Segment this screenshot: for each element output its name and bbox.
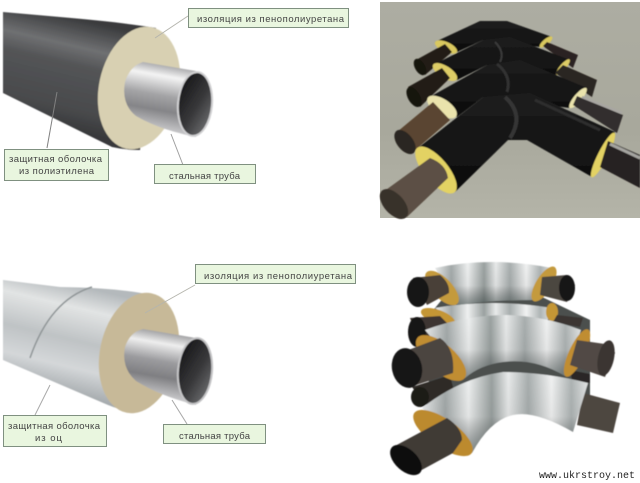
elbow 3 (388, 315, 618, 391)
leader line: steel pipe (172, 400, 187, 424)
elbow 4 (front) (385, 372, 620, 481)
elbow 1 (rear) (411, 21, 578, 77)
steel pipe (124, 329, 196, 405)
pipe jacket: galvanized steel (3, 280, 152, 412)
elbow 4 (front) (375, 93, 640, 224)
photo background: concrete floor (380, 2, 640, 218)
label: insulation: изоляция из пенополиуретана (197, 14, 345, 25)
label: steel pipe (154, 164, 256, 184)
label: jacket (4, 416, 106, 446)
label: jacket: из оц (35, 433, 63, 444)
foam insulation end (88, 285, 190, 421)
photo: galvanized insulated elbows (385, 262, 635, 482)
label: insulation (188, 8, 348, 28)
elbow 1 (top) (407, 262, 575, 311)
pipe jacket: black polyethylene (3, 12, 156, 150)
label: jacket: из полиэтилена (19, 166, 95, 177)
rear pipe stubs (412, 375, 455, 405)
leader line: jacket (35, 385, 50, 415)
leader line: insulation (155, 16, 188, 38)
elbow 3 (390, 60, 623, 158)
label: steel pipe (164, 424, 266, 444)
label: steel pipe: стальная труба (169, 171, 241, 182)
label: insulation (196, 264, 356, 284)
label: jacket: защитная оболочка (8, 421, 101, 432)
foam insulation end (87, 19, 191, 157)
elbow 2 (rear, behind) (408, 303, 583, 347)
leader line: jacket (47, 92, 57, 148)
diagram: polyethylene-jacketed pipe (3, 8, 348, 184)
photo: black insulated elbows (375, 2, 640, 224)
leader line: insulation (145, 285, 195, 313)
elbow 2 (403, 37, 597, 110)
steel pipe mouth (174, 336, 216, 406)
watermark: www.ukrstroy.net (539, 470, 635, 482)
steel pipe (124, 62, 196, 137)
diagram: galvanized-jacketed pipe (3, 264, 356, 446)
label: steel pipe: стальная труба (179, 431, 251, 442)
label: insulation: изоляция из пенополиуретана (204, 271, 353, 282)
label: jacket: защитная оболочка (9, 154, 103, 165)
jacket seam (30, 287, 92, 358)
steel pipe mouth (174, 70, 216, 138)
label: jacket (4, 150, 108, 180)
leader line: steel pipe (171, 134, 183, 165)
shadow backdrop between elbows (425, 296, 590, 400)
